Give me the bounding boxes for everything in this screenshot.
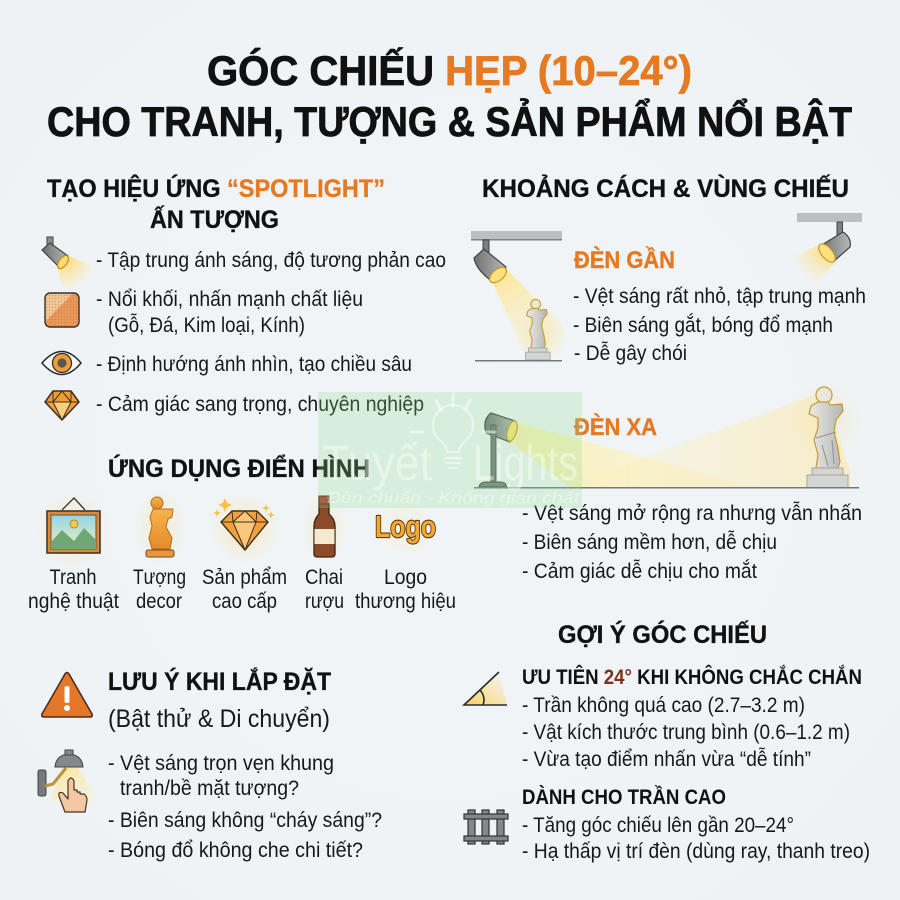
item text: gaze: - Định hướng ánh nhìn, tạo chiều sâu xyxy=(96,353,412,376)
icon: material swatch xyxy=(45,293,79,327)
bullet list: high ceiling xyxy=(522,814,870,863)
bullet list: near lamp: - Vệt sáng rất nhỏ, tập trung mạnh xyxy=(573,285,866,308)
heading: distance: KHOẢNG CÁCH & VÙNG CHIẾU xyxy=(482,173,849,203)
icon: framed painting xyxy=(35,492,111,568)
icon: small spotlight xyxy=(42,237,93,291)
heading: suggestions: GỢI Ý GÓC CHIẾU xyxy=(558,619,767,649)
subheading: prefer 24 degrees: ƯU TIÊN 24° KHI KHÔNG CHẮC CHẮN xyxy=(522,665,862,689)
bullet list: far lamp xyxy=(522,502,862,583)
bullet list: prefer 24 degrees: - Vừa tạo điểm nhấn vừa “dễ tính” xyxy=(522,748,811,771)
item text: contrast: - Tập trung ánh sáng, độ tương phản cao xyxy=(96,249,446,272)
label: statue: decor xyxy=(136,590,182,613)
heading: spotlight: TẠO HIỆU ỨNG “SPOTLIGHT” xyxy=(47,173,385,203)
bullet list: far lamp: - Cảm giác dễ chịu cho mắt xyxy=(522,560,757,583)
bullet list: high ceiling: - Hạ thấp vị trí đèn (dùng ray, thanh treo) xyxy=(522,840,870,863)
label: premium products xyxy=(202,566,287,613)
label: wine: rượu xyxy=(305,590,344,613)
icon: warning triangle xyxy=(42,672,92,717)
bullet list: prefer 24 degrees xyxy=(522,694,850,771)
icon: track rail xyxy=(464,810,508,844)
bullet list: checks: - Vệt sáng trọn vẹn khung xyxy=(108,752,334,775)
subheading: test and move: (Bật thử & Di chuyển) xyxy=(108,705,330,733)
panel: angle suggestions xyxy=(464,619,870,863)
panel: spotlight effect xyxy=(42,173,446,420)
illustration: near lamp with statue xyxy=(471,231,568,363)
heading: spotlight xyxy=(47,173,385,234)
icon: lamp and hand xyxy=(38,750,97,812)
bullet list: prefer 24 degrees: - Trần không quá cao (2.7–3.2 m) xyxy=(522,694,805,717)
bullet list: far lamp: - Vệt sáng mở rộng ra nhưng vẫn nhấn xyxy=(522,502,862,525)
label: logo xyxy=(355,566,456,613)
bullet list: checks: - Bóng đổ không che chi tiết? xyxy=(108,839,363,862)
title xyxy=(47,46,852,145)
label: logo: thương hiệu xyxy=(355,590,456,613)
heading: spotlight: ẤN TƯỢNG xyxy=(150,205,279,234)
icon: wine bottle xyxy=(300,492,348,564)
watermark: Tuyết Lights: Lights xyxy=(473,435,578,491)
watermark: Tuyết Lights: Tuyết xyxy=(322,435,432,491)
icon: logo wordmark xyxy=(373,496,437,560)
bullet list: high ceiling: - Tăng góc chiếu lên gần 20–24° xyxy=(522,814,794,837)
label: statue: Tượng xyxy=(133,566,186,589)
bullet list: checks: - Biên sáng không “cháy sáng”? xyxy=(108,809,382,832)
label: painting: nghệ thuật xyxy=(28,590,119,613)
bullet list: checks: tranh/bề mặt tượng? xyxy=(120,777,299,800)
panel: typical applications xyxy=(28,453,456,613)
icon: sparkling diamond xyxy=(209,492,281,564)
bullet list: checks xyxy=(108,752,382,862)
label: statue xyxy=(133,566,186,613)
bullet list: near lamp xyxy=(573,285,866,365)
icon: logo wordmark: Logo xyxy=(375,509,436,544)
label: painting xyxy=(28,566,119,613)
label: painting: Tranh xyxy=(50,566,96,589)
heading: installation: LƯU Ý KHI LẮP ĐẶT xyxy=(108,666,331,696)
heading: far lamp: ĐÈN XA xyxy=(574,413,657,441)
icon: eye xyxy=(42,352,81,374)
icon: angle xyxy=(464,672,507,705)
watermark: Tuyết Lights xyxy=(318,392,582,508)
label: wine xyxy=(305,566,344,613)
bullet list: prefer 24 degrees: - Vật kích thước trung bình (0.6–1.2 m) xyxy=(522,721,850,744)
heading: applications: ỨNG DỤNG ĐIỂN HÌNH xyxy=(108,453,370,483)
item text: luxury: - Cảm giác sang trọng, chuyên nghiệp xyxy=(96,393,424,416)
bullet list: near lamp: - Biên sáng gắt, bóng đổ mạnh xyxy=(573,314,833,337)
icon: statue xyxy=(133,489,187,565)
label: premium products: Sản phẩm xyxy=(202,566,287,589)
subheading: high ceiling: DÀNH CHO TRẦN CAO xyxy=(522,786,726,809)
heading: near lamp: ĐÈN GẦN xyxy=(574,246,675,274)
item text: material xyxy=(96,288,363,337)
label: logo: Logo xyxy=(384,566,427,589)
icon: diamond xyxy=(45,391,79,420)
illustration: far lamp with statue xyxy=(474,382,863,488)
bullet list: near lamp: - Dễ gây chói xyxy=(574,342,687,365)
title: GÓC CHIẾU HẸP (10–24°) xyxy=(207,46,692,94)
item text: material: - Nổi khối, nhấn mạnh chất liệu xyxy=(96,288,363,311)
panel: installation notes xyxy=(38,666,382,862)
item text: material: (Gỗ, Đá, Kim loại, Kính) xyxy=(108,314,305,337)
bullet list: far lamp: - Biên sáng mềm hơn, dễ chịu xyxy=(522,531,777,554)
label: premium products: cao cấp xyxy=(212,590,277,613)
label: wine: Chai xyxy=(305,566,343,589)
panel: distance and beam zone xyxy=(471,173,866,583)
watermark: Tuyết Lights: Đèn chuẩn - Không gian chất xyxy=(327,489,580,507)
illustration: ceiling lamp xyxy=(792,213,862,286)
